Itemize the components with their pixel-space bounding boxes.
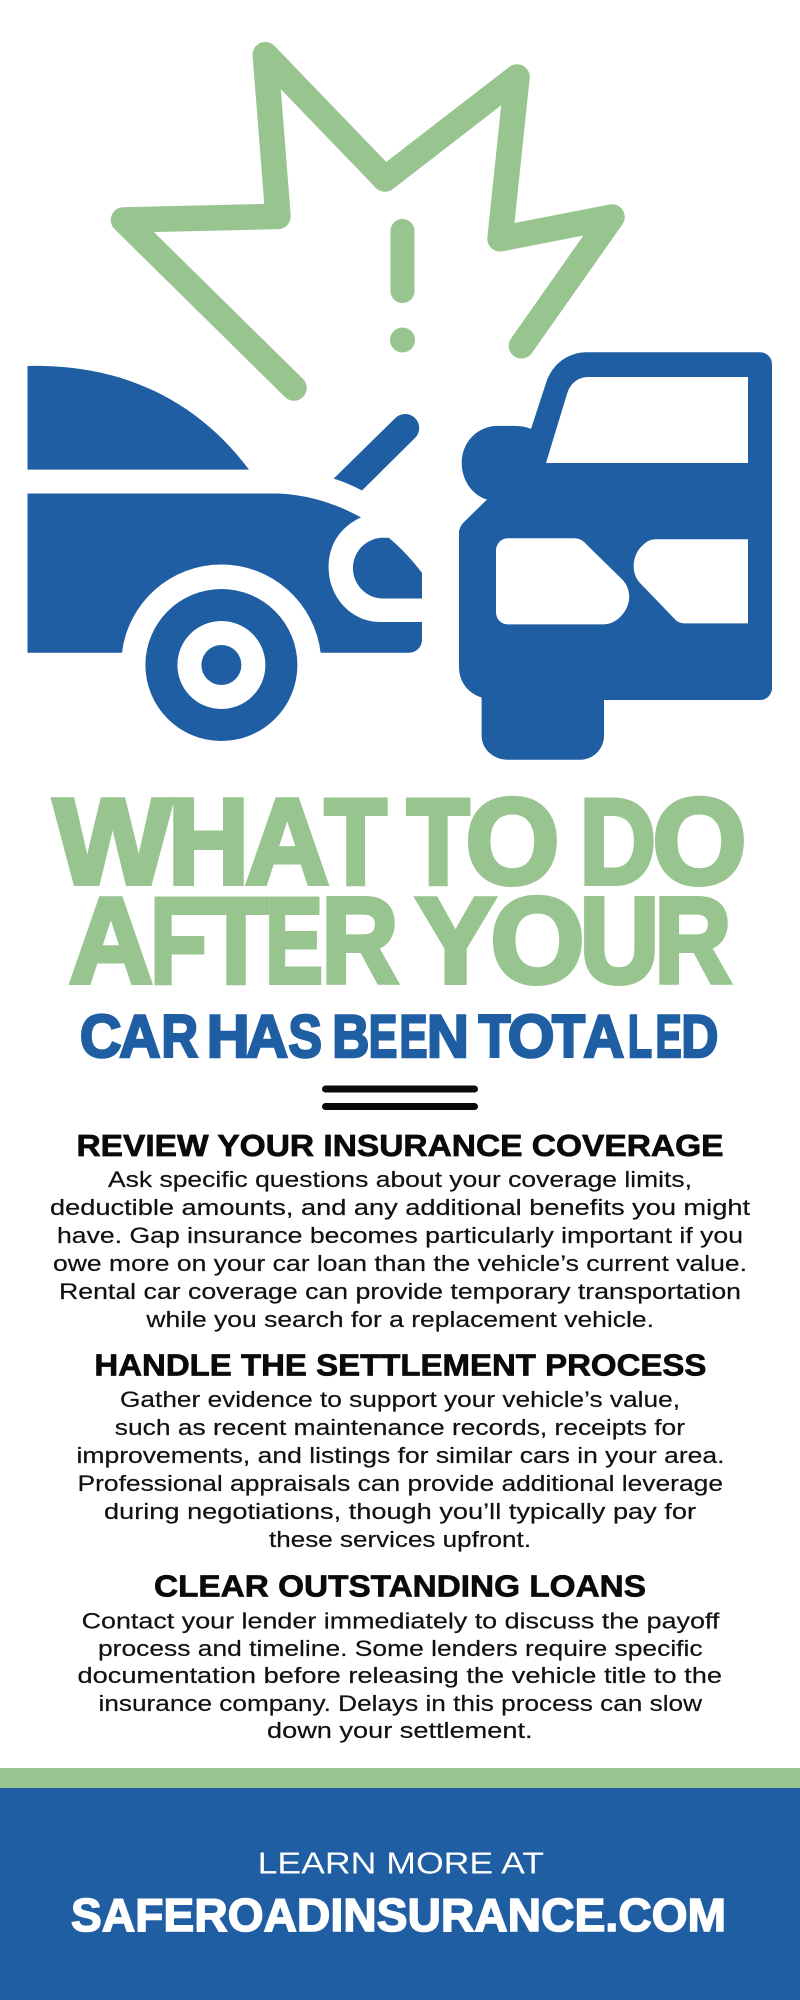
text block: settlement process: such as recent maintenance records, receipts for [115,1415,685,1440]
subtitle: S [288,1003,322,1070]
title: main heading [54,774,746,1008]
text block: outstanding loans: Contact your lender immediately to discuss the payoff [82,1609,720,1634]
subtitle: C [80,1003,122,1070]
subtitle: H [207,1003,250,1070]
title: main heading: H [168,774,249,910]
text block: review coverage: while you search for a replacement vehicle. [145,1307,654,1332]
text block: review coverage: owe more on your car loan than the vehicle’s current value. [53,1251,747,1276]
title: main heading: A [245,774,329,910]
title: main heading: Y [416,872,496,1008]
subtitle: E [656,1003,682,1070]
text block: review coverage: Ask specific questions about your coverage limits, [108,1167,692,1192]
footer text: learn more at: LEARN MORE AT [258,1846,544,1880]
title: main heading: E [265,872,323,1008]
subtitle: A [246,1003,288,1070]
icon: exclamation mark [390,231,415,352]
footer text: website: SAFEROADINSURANCE.COM [71,1889,726,1941]
subtitle: E [400,1003,428,1070]
subtitle: T [478,1003,511,1070]
title: main heading: O [652,774,746,910]
section: clear outstanding loans [78,1570,722,1743]
text block: settlement process: Gather evidence to support your vehicle’s value, [120,1387,680,1412]
title: main heading: O [466,774,560,910]
heading: settlement process: HANDLE THE SETTLEMENT PROCESS [94,1348,706,1382]
heading: outstanding loans: CLEAR OUTSTANDING LOANS [154,1570,646,1604]
text block: outstanding loans: down your settlement. [267,1718,533,1743]
text block: outstanding loans: insurance company. Delays in this process can slow [98,1691,702,1716]
text block: review coverage: have. Gap insurance becomes particularly important if you [57,1223,743,1248]
subtitle: N [427,1003,469,1070]
subtitle: R [161,1003,198,1070]
title: main heading: T [204,872,268,1008]
footer band: green stripe [0,1768,800,1788]
subtitle: E [369,1003,397,1070]
text block: outstanding loans: process and timeline. Some lenders require specific [98,1636,703,1661]
text block: outstanding loans: documentation before releasing the vehicle title to the [78,1663,722,1688]
section: review your insurance coverage [50,1129,750,1332]
icon: green impact burst [124,55,612,388]
subtitle: O [508,1003,554,1070]
text block: review coverage: Rental car coverage can provide temporary transportation [59,1279,741,1304]
double rule divider [322,1086,478,1110]
text block: settlement process: Professional appraisals can provide additional leverage [78,1471,723,1496]
title: main heading: O [490,872,584,1008]
title: main heading: F [150,872,207,1008]
subtitle: A [583,1003,624,1070]
title: main heading: W [54,774,173,910]
subtitle [80,1003,718,1070]
section: handle the settlement process [76,1348,724,1552]
text block: review coverage [50,1167,750,1332]
text block: settlement process: these services upfront. [269,1527,531,1552]
heading: review coverage: REVIEW YOUR INSURANCE COVERAGE [76,1129,723,1163]
subtitle: D [681,1003,718,1070]
title: main heading: R [321,872,398,1008]
footer panel: blue [0,1788,800,2000]
subtitle: B [332,1003,369,1070]
icon: left car [28,366,422,741]
text block: settlement process: during negotiations, though you’ll typically pay for [104,1499,696,1524]
title: main heading: D [580,774,656,910]
icon: right car front view [459,352,772,760]
text block: review coverage: deductible amounts, and any additional benefits you might [50,1195,750,1220]
title: main heading: R [654,872,731,1008]
subtitle: T [552,1003,585,1070]
illustration: car crash icon [28,55,772,760]
title: main heading: T [325,774,387,910]
text block: outstanding loans [78,1609,722,1743]
title: main heading: A [69,872,153,1008]
subtitle: L [628,1003,652,1070]
text block: settlement process: improvements, and listings for similar cars in your area. [76,1443,724,1468]
title: main heading: T [407,774,470,910]
subtitle: A [119,1003,160,1070]
title: main heading: U [580,872,659,1008]
text block: settlement process [76,1387,724,1552]
